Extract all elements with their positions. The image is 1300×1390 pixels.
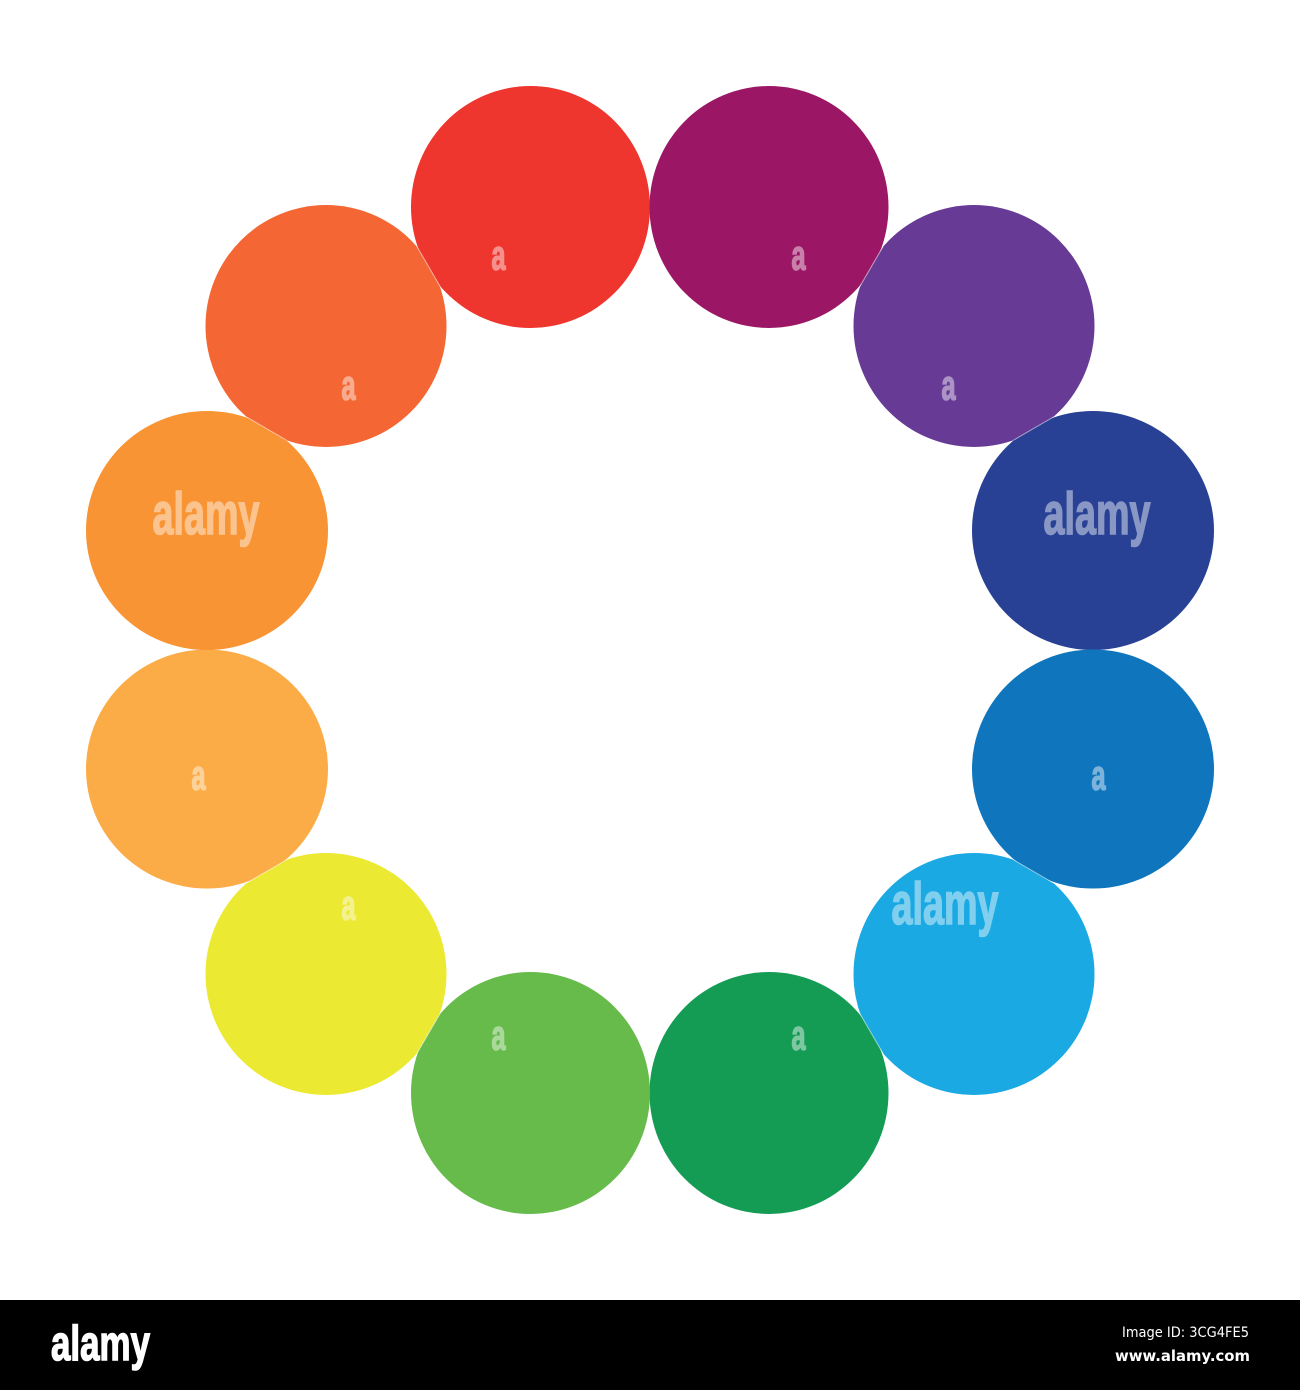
- footer background: [0, 1300, 1300, 1390]
- watermark: yellow circle: a: [342, 882, 356, 928]
- circle: orange: [86, 411, 328, 650]
- footer logo: alamy: [51, 1317, 150, 1371]
- circle: dark green: [650, 972, 888, 1214]
- watermark: purple circle: a: [942, 362, 956, 408]
- colour wheel: [86, 86, 1214, 1214]
- watermark: light green circle: a: [492, 1012, 506, 1058]
- circle: red-orange: [206, 205, 446, 447]
- website: www.alamy.com: [1115, 1347, 1250, 1365]
- watermark: orange circle: alamy: [152, 481, 260, 547]
- watermark: magenta circle: a: [792, 232, 806, 278]
- circle: purple: [854, 205, 1094, 447]
- circle: light orange: [86, 650, 328, 888]
- circle: light green: [411, 972, 650, 1214]
- circle: blue: [972, 650, 1214, 888]
- image id: Image ID: 3CG4FE5: [1122, 1325, 1249, 1341]
- watermark: red-orange circle: a: [342, 362, 356, 408]
- watermark: indigo circle: alamy: [1044, 481, 1151, 547]
- circle: magenta: [650, 86, 888, 328]
- watermark: red circle: a: [492, 232, 506, 278]
- circle: yellow: [206, 853, 446, 1095]
- watermark: light orange circle: a: [192, 752, 206, 798]
- watermark: blue circle: a: [1092, 752, 1106, 798]
- circle: red: [411, 86, 650, 328]
- watermark: dark green circle: a: [792, 1012, 806, 1058]
- circle: indigo: [972, 411, 1214, 650]
- footer bar: [0, 1300, 1300, 1390]
- circle: sky blue: [854, 853, 1094, 1095]
- watermark: sky blue circle: alamy: [892, 871, 999, 937]
- watermarks: [152, 232, 1151, 1058]
